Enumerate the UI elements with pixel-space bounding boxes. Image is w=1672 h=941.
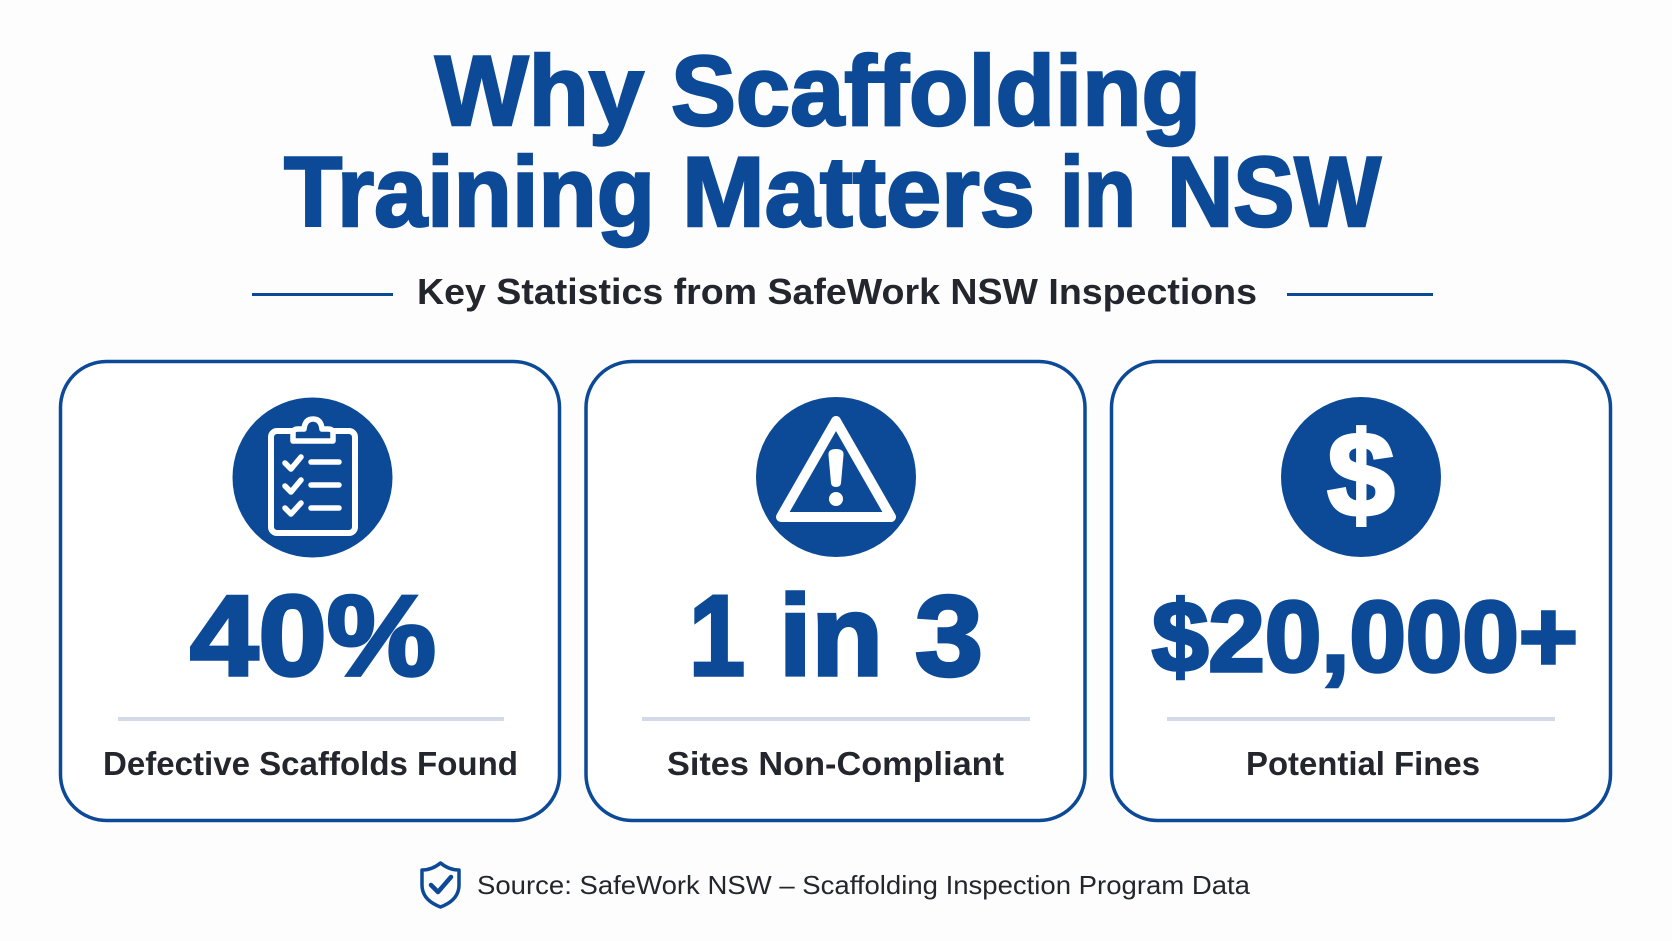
subtitle with side rules — [252, 271, 1433, 312]
title: Matters — [682, 136, 1035, 247]
panel: potential fines — [1112, 362, 1610, 820]
stat: 1 in 3: 1 — [689, 573, 745, 700]
label: defective scaffolds found: Defective Scaffolds Found — [103, 745, 518, 782]
stat: $20,000+: $20,000+ — [1152, 581, 1578, 693]
icon: dollar — [1281, 397, 1441, 557]
stat: 40%: 40% — [190, 573, 436, 700]
stat: 1 in 3: 3 — [915, 573, 983, 700]
title: Scaffolding — [671, 35, 1201, 146]
icon: clipboard checklist — [232, 398, 392, 558]
icon: dollar: $ — [1328, 408, 1394, 542]
subtitle with side rules: Key Statistics from SafeWork NSW Inspections — [417, 271, 1257, 312]
title: NSW — [1167, 136, 1382, 247]
icon: warning triangle — [756, 397, 916, 557]
label: potential fines: Potential Fines — [1246, 745, 1480, 782]
title — [284, 35, 1382, 247]
source line — [422, 863, 1251, 907]
source line: Source: SafeWork NSW – Scaffolding Inspection Program Data — [477, 870, 1251, 900]
stat: 1 in 3: in — [779, 573, 883, 700]
title: in — [1060, 136, 1136, 247]
title: Why — [435, 35, 644, 146]
icon: shield check — [422, 863, 459, 907]
stat: 1 in 3 — [689, 573, 983, 700]
label: sites non-compliant: Sites Non-Compliant — [667, 745, 1004, 782]
panel: defective scaffolds — [60, 362, 560, 820]
title: Training — [284, 136, 655, 247]
panel: sites non-compliant — [586, 362, 1085, 820]
